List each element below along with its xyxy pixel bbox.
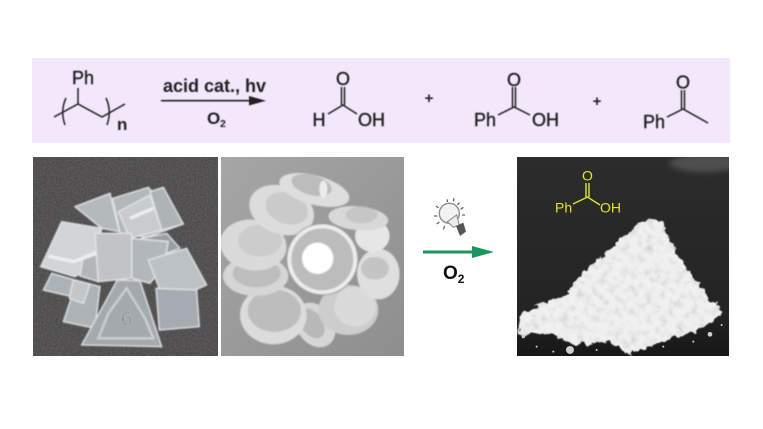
centre lid bright spot xyxy=(302,243,333,274)
benzoic acid structure: Ph xyxy=(474,110,496,130)
reaction arrow with conditions xyxy=(161,76,266,130)
photo: benzoic acid powder xyxy=(517,154,740,356)
lid bottom left xyxy=(240,286,307,344)
polystyrene repeat unit structure xyxy=(54,68,127,134)
photo: polystyrene plastic pieces xyxy=(33,157,218,356)
benzoic acid structure xyxy=(474,70,559,130)
reaction arrow with conditions: O xyxy=(207,109,220,128)
label: O2: O xyxy=(443,263,458,284)
recycling number 6: 6 xyxy=(121,308,132,331)
powder pile xyxy=(519,219,724,354)
centre lid ring xyxy=(296,225,347,296)
polystyrene repeat unit structure: Ph xyxy=(72,68,94,88)
acetophenone structure: Ph xyxy=(643,112,665,132)
formic acid structure xyxy=(312,69,385,130)
formic acid structure: O xyxy=(336,69,350,89)
plus sign: + xyxy=(593,93,602,110)
lid left xyxy=(221,218,288,271)
benzoic acid structure: OH xyxy=(532,110,559,130)
lid upper left xyxy=(248,184,315,236)
benzoic acid structure: O xyxy=(507,70,521,90)
formic acid structure: OH xyxy=(358,110,385,130)
lid upper right inner xyxy=(355,220,390,252)
plus sign: + xyxy=(425,90,434,107)
lid upper right xyxy=(328,206,389,230)
green reaction arrow xyxy=(423,246,494,258)
yellow benzoic acid structure: Ph xyxy=(555,200,572,216)
lid lower right xyxy=(318,285,378,335)
yellow benzoic acid structure: OH xyxy=(600,200,621,216)
scattered powder specks xyxy=(522,324,723,354)
lid right xyxy=(357,249,400,299)
lid top xyxy=(278,172,350,208)
icon: light bulb xyxy=(434,198,466,236)
label: O2: 2 xyxy=(458,272,465,286)
acetophenone structure: O xyxy=(676,72,690,92)
photo: white polystyrene lids xyxy=(217,157,404,356)
panel: reaction scheme banner xyxy=(32,58,730,143)
polystyrene repeat unit structure: n xyxy=(117,115,127,134)
yellow benzoic acid structure: O xyxy=(582,168,593,184)
reaction arrow with conditions: acid cat., hv xyxy=(163,76,266,96)
acetophenone structure xyxy=(643,72,708,132)
formic acid structure: H xyxy=(312,110,326,130)
lid bottom centre xyxy=(298,302,336,348)
yellow benzoic acid structure xyxy=(556,171,620,212)
reaction arrow with conditions: 2 xyxy=(220,118,226,130)
lid lower left xyxy=(222,262,289,296)
